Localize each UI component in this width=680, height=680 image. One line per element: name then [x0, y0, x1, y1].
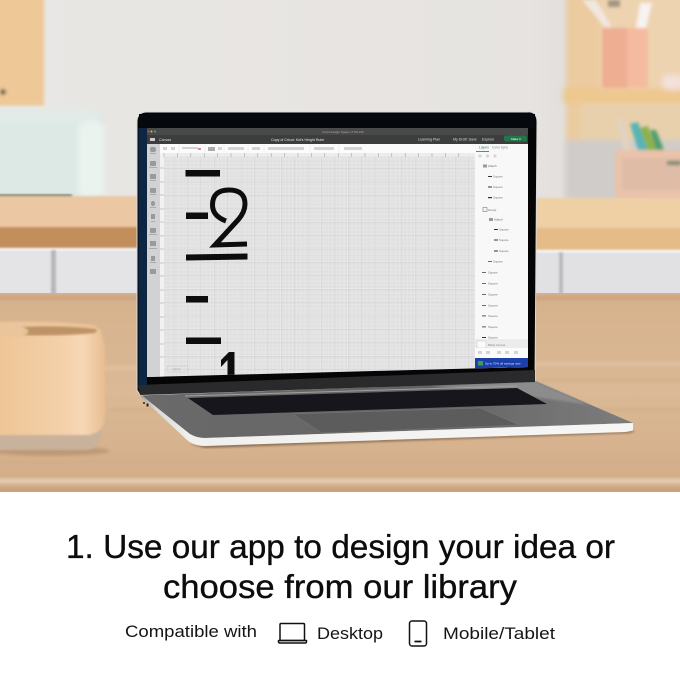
layers panel: Square — [493, 196, 503, 200]
layers panel: Square — [488, 282, 498, 286]
heading — [66, 528, 615, 605]
app header bar: Copy of Cricut: Kid's Height Ruler — [271, 138, 325, 142]
layers panel: Attach — [494, 218, 503, 222]
icon: laptop — [278, 624, 306, 643]
ports — [143, 402, 148, 406]
lid — [137, 112, 537, 395]
machine slot — [0, 194, 74, 198]
promo banner: Up to 70% off savings now — [485, 362, 521, 366]
app header bar: My Draft: Save — [453, 138, 477, 142]
trackpad — [293, 408, 519, 433]
laptop — [137, 112, 636, 448]
coffee mug — [0, 321, 110, 456]
options toolbar — [160, 144, 475, 153]
layers panel: Square — [488, 304, 498, 308]
compatible with label: Compatible with — [125, 622, 257, 641]
layers panel: Color Sync — [492, 146, 508, 150]
pencil basket — [615, 116, 680, 200]
layers panel: Layers — [479, 146, 489, 150]
layers panel: Square — [488, 270, 498, 274]
wall — [0, 0, 568, 199]
mobile tablet label: Mobile/Tablet — [443, 624, 555, 643]
right shelf unit — [563, 0, 680, 200]
pink cup with tools — [582, 0, 652, 88]
wooden desk — [0, 293, 680, 492]
zoom control — [167, 366, 188, 372]
photo: kitchen desk scene — [0, 0, 680, 492]
layers panel: Square — [488, 314, 498, 318]
app header bar: Learning Plan — [418, 138, 440, 142]
layers panel: Square — [499, 249, 509, 253]
layers panel: Square — [488, 292, 498, 296]
canvas grid — [148, 156, 527, 377]
chin — [138, 370, 535, 395]
promo banner — [475, 358, 528, 369]
layers panel: Square — [488, 336, 498, 340]
right counter — [536, 197, 680, 293]
app header bar — [147, 135, 528, 144]
screen: design app — [147, 128, 528, 378]
app header bar: Canvas — [159, 138, 171, 142]
hinge highlight — [185, 386, 517, 396]
cutting machine — [0, 108, 106, 201]
layers panel: Square — [493, 260, 503, 264]
layers panel: Square — [493, 174, 503, 178]
icon: phone — [410, 621, 426, 646]
desk grain — [0, 298, 680, 490]
ruler marks design — [186, 170, 248, 344]
layers panel: Blank Canvas — [488, 343, 506, 347]
rulers — [160, 153, 475, 377]
app title bar: Cricut Design Space v7.58.128 — [322, 130, 364, 134]
left counter — [0, 194, 136, 293]
layers panel — [475, 144, 528, 368]
wallpaper sliver — [138, 128, 147, 385]
desktop label: Desktop — [317, 624, 383, 643]
layers panel: Group — [488, 208, 497, 212]
layers panel: Square — [499, 228, 509, 232]
laptop shadow — [190, 431, 636, 448]
layers panel: Square — [488, 325, 498, 329]
heading: 1. Use our app to design your idea or — [66, 528, 615, 565]
left pegboard — [0, 0, 44, 106]
app header bar: Make It — [511, 137, 521, 141]
left tools sidebar — [147, 144, 160, 378]
base right highlight — [430, 381, 590, 405]
laptop base — [140, 381, 633, 438]
app title bar — [147, 128, 528, 135]
base front silver strip — [140, 394, 633, 446]
compatibility row — [125, 621, 555, 646]
layers panel: Square — [499, 238, 509, 242]
keyboard — [188, 388, 547, 415]
numeral 2 — [212, 190, 247, 245]
layers panel: Attach — [488, 164, 497, 168]
numeral 1 — [221, 352, 234, 375]
layers panel: Square — [493, 185, 503, 189]
app header bar: Explore — [482, 138, 494, 142]
zoom control: 100% — [172, 368, 180, 372]
heading: choose from our library — [163, 568, 518, 605]
